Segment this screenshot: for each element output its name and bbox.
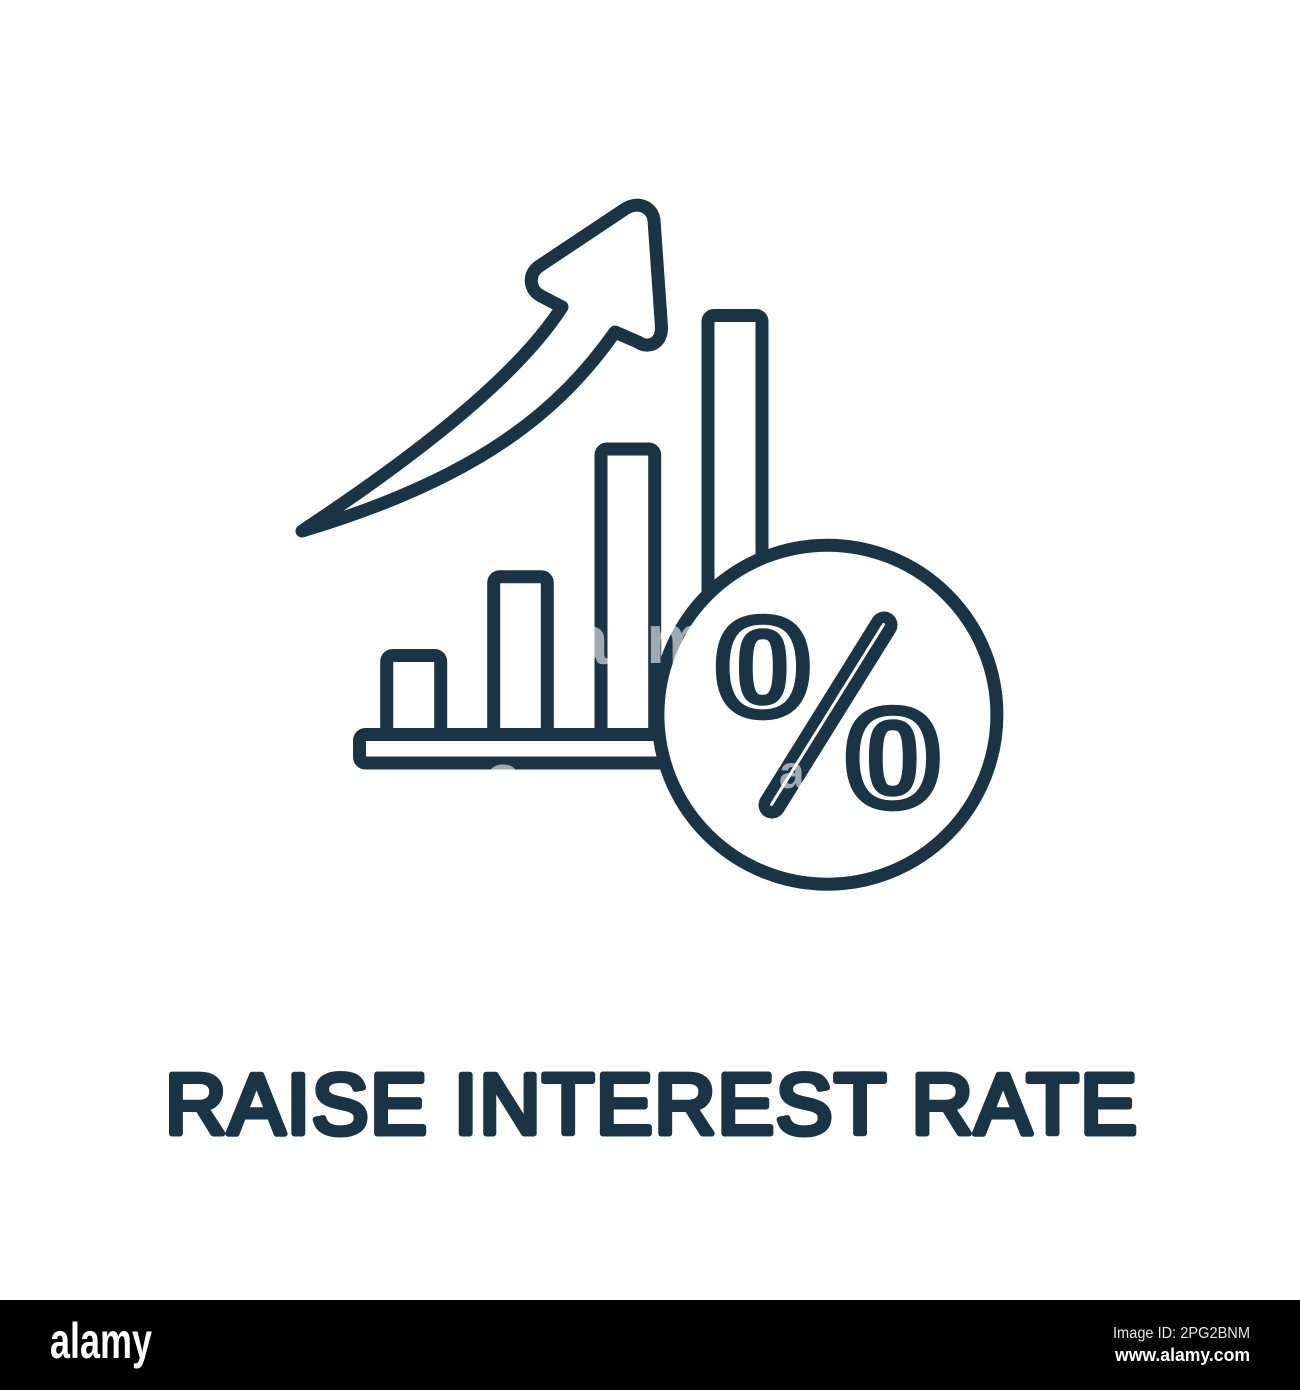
image id: Image ID: 2PG2BNM (1113, 1325, 1250, 1342)
watermark fragments: m (646, 600, 708, 678)
watermark fragments (485, 600, 805, 814)
watermark fragments: a (570, 601, 610, 679)
watermark fragments: a (485, 740, 523, 814)
footer logo: alamy (50, 1313, 152, 1369)
chart baseline (360, 734, 700, 763)
watermark fragments: a (779, 746, 805, 798)
bar 2 (494, 577, 547, 734)
percent sign (716, 592, 940, 834)
website: www.alamy.com (1114, 1345, 1250, 1365)
footer bar (0, 1300, 1300, 1390)
title: RAISE INTEREST RATE (165, 1058, 1137, 1152)
percent left zero: 0 (716, 592, 810, 743)
bar 4 (708, 316, 762, 640)
percent slash (772, 624, 884, 805)
icon: raise interest rate (302, 205, 997, 884)
bar 1 (387, 656, 441, 734)
percent right zero: 0 (846, 683, 940, 834)
icon: rising arrow (302, 205, 662, 531)
percent circle (658, 545, 997, 884)
bar 3 (601, 449, 655, 734)
